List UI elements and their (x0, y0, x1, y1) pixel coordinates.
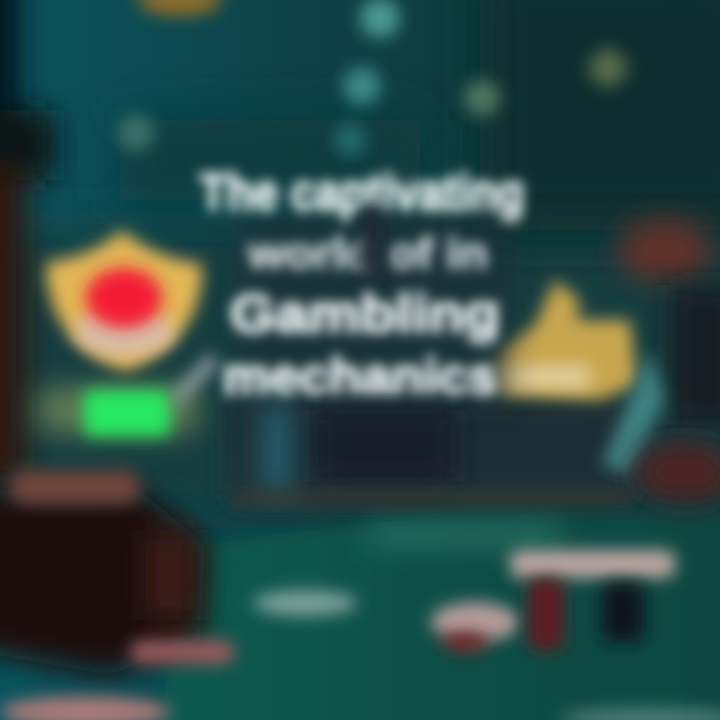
figure: left hand (0, 470, 235, 720)
icon: shield with red badge (46, 230, 202, 372)
title: mechanics (222, 348, 498, 406)
title: The captivating (200, 164, 524, 222)
figure: right player (602, 218, 720, 502)
title: world of in (247, 229, 488, 278)
title: Gambling (230, 284, 500, 344)
poker table (0, 511, 720, 720)
background lights (118, 0, 627, 156)
title (200, 164, 524, 406)
figure: left person (0, 0, 55, 480)
icon: green banner (38, 358, 215, 436)
dark stripes under title (230, 205, 630, 504)
icon: thumbs up (498, 280, 638, 400)
poker chips (431, 550, 675, 652)
card on table (253, 590, 357, 616)
